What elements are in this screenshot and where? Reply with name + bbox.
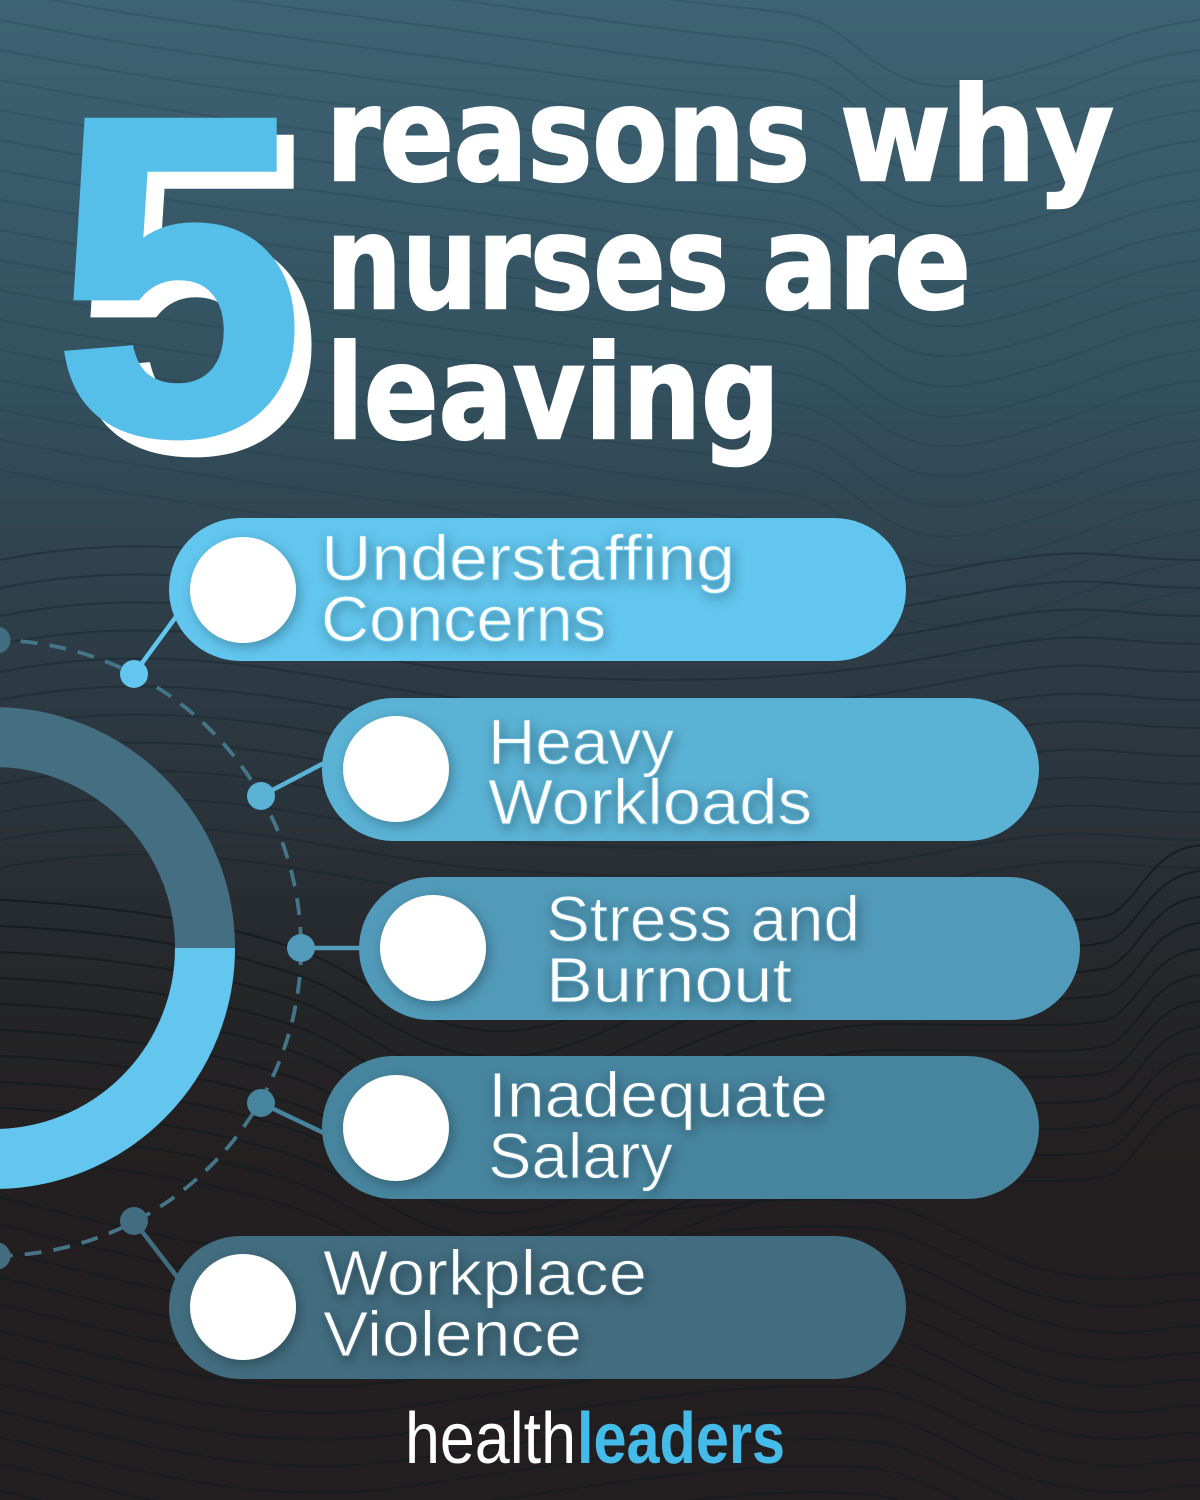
title: are bbox=[762, 187, 971, 339]
title bbox=[326, 59, 1114, 469]
title: why bbox=[840, 59, 1114, 211]
pill: understaffing concerns: Understaffing bbox=[321, 522, 735, 594]
logo: healthleaders bbox=[405, 1399, 785, 1479]
connector: workplace violence bbox=[120, 1207, 178, 1278]
number 5 white shadow: 5 bbox=[72, 41, 320, 545]
pill: understaffing concerns bbox=[169, 518, 906, 661]
title: nurses bbox=[326, 187, 729, 339]
pill: heavy workloads: Workloads bbox=[488, 766, 812, 838]
pill: workplace violence bbox=[169, 1236, 906, 1379]
pill: workplace violence: Workplace bbox=[323, 1237, 647, 1309]
pill: stress and burnout: Stress and bbox=[546, 883, 860, 955]
big number 5 bbox=[55, 24, 320, 545]
pill: stress and burnout bbox=[359, 877, 1080, 1020]
pill: understaffing concerns: Concerns bbox=[321, 583, 606, 655]
pill: heavy workloads: Heavy bbox=[488, 706, 674, 778]
connector: stress and burnout bbox=[287, 934, 362, 962]
connector: inadequate salary bbox=[247, 1089, 326, 1134]
pill: inadequate salary: Salary bbox=[488, 1120, 673, 1192]
orbit end dot bottom bbox=[0, 1242, 10, 1270]
pill: workplace violence: Violence bbox=[323, 1298, 582, 1370]
pill: heavy workloads bbox=[322, 698, 1039, 841]
connector: heavy workloads bbox=[247, 762, 326, 810]
connector: understaffing bbox=[120, 614, 178, 688]
orbit end dot top bbox=[0, 626, 10, 654]
number 5 blue face: 5 bbox=[55, 24, 303, 528]
pill: stress and burnout: Burnout bbox=[546, 944, 792, 1016]
dashed orbit bbox=[0, 640, 301, 1256]
title: leaving bbox=[326, 317, 780, 469]
pill: inadequate salary bbox=[322, 1056, 1039, 1199]
donut ring bbox=[0, 737, 205, 1159]
logo: healthleaders: leaders bbox=[577, 1399, 785, 1479]
title: reasons bbox=[326, 59, 810, 211]
pill: inadequate salary: Inadequate bbox=[488, 1059, 828, 1131]
logo: healthleaders: health bbox=[405, 1399, 576, 1479]
